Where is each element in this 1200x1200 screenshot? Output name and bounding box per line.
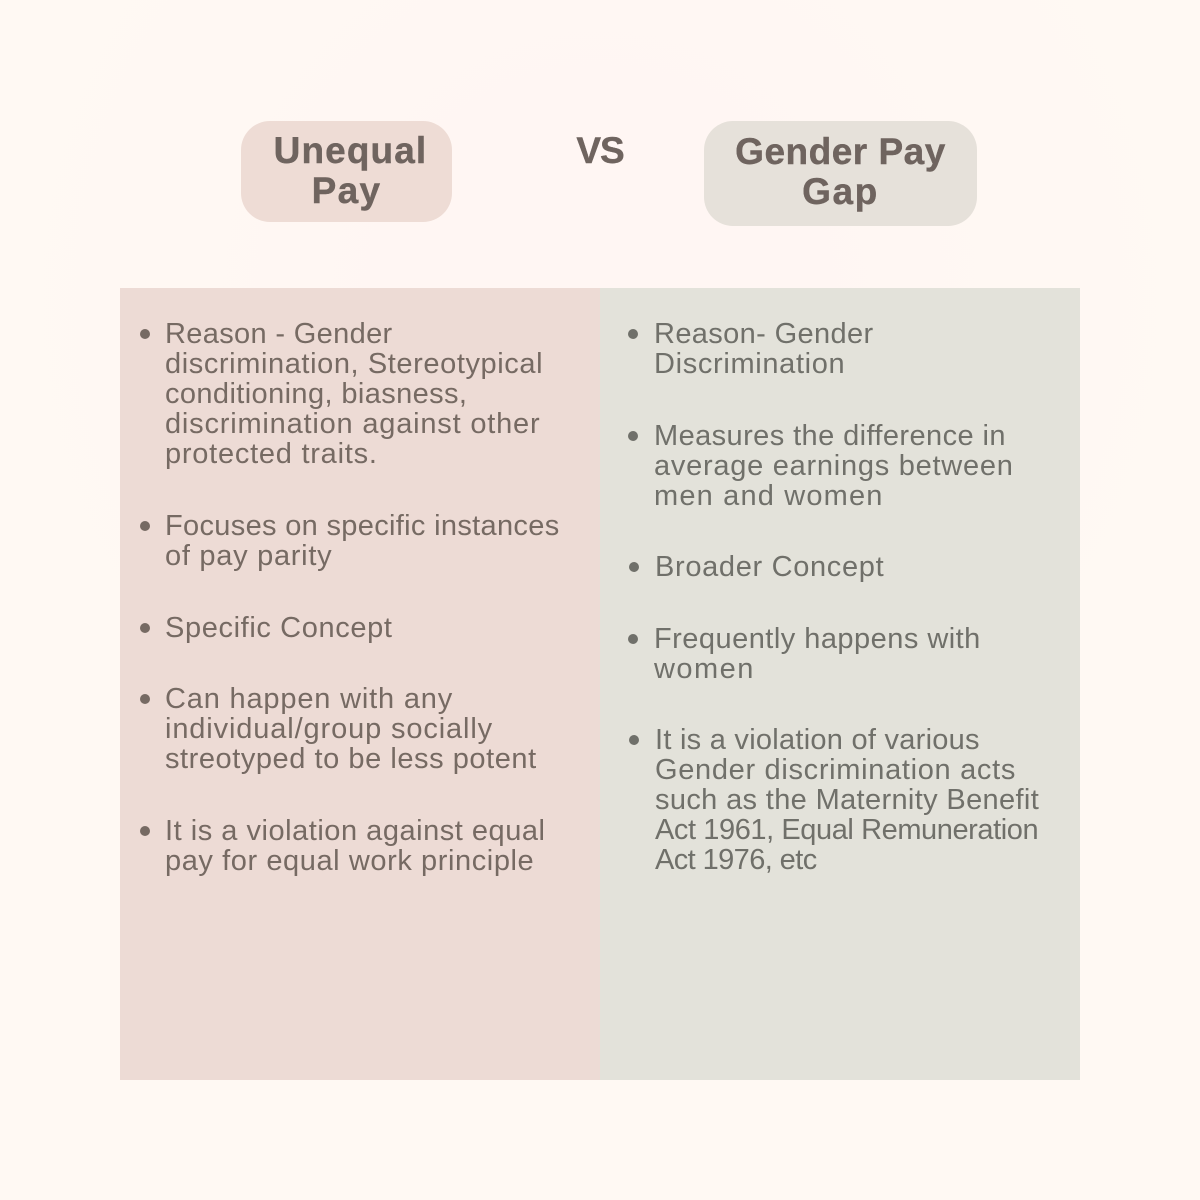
bullet list: Gender Pay Gap: Act 1976, etc <box>655 844 817 876</box>
header pill: Unequal Pay <box>241 121 452 222</box>
bullet list: Unequal Pay: Can happen with any <box>165 683 453 715</box>
bullet list: Gender Pay Gap: Gender discrimination acts <box>655 754 1016 786</box>
bullet list: Gender Pay Gap: Act 1961, Equal Remuneration <box>655 814 1038 846</box>
bullet list: Gender Pay Gap: women <box>654 653 755 685</box>
header pill: Gender Pay Gap: Gender Pay <box>735 131 946 172</box>
bullet list: Unequal Pay: discrimination, Stereotypical <box>165 348 543 380</box>
bullet list: Gender Pay Gap: Discrimination <box>654 348 845 380</box>
bullet list: Gender Pay Gap: Frequently happens with <box>654 623 981 655</box>
header pill: Unequal Pay: Unequal <box>274 130 427 171</box>
panel: Unequal Pay <box>120 288 600 1080</box>
header pill: Gender Pay Gap: Gap <box>802 171 879 212</box>
bullet list: Gender Pay Gap: average earnings between <box>654 450 1014 482</box>
bullet list: Gender Pay Gap: men and women <box>654 480 884 512</box>
bullet list: Unequal Pay: discrimination against other <box>165 408 540 440</box>
bullet list: Unequal Pay: Specific Concept <box>165 612 393 644</box>
bullet list: Gender Pay Gap: It is a violation of various <box>655 724 980 756</box>
panel: Gender Pay Gap <box>600 288 1080 1080</box>
bullet list: Unequal Pay: Focuses on specific instances <box>165 510 560 542</box>
header pill: Gender Pay Gap <box>704 121 977 226</box>
bullet list: Gender Pay Gap: Measures the difference in <box>654 420 1006 452</box>
bullet list: Unequal Pay: Reason - Gender <box>165 318 393 350</box>
bullet list: Gender Pay Gap: such as the Maternity Benefit <box>655 784 1039 816</box>
bullet list: Unequal Pay: conditioning, biasness, <box>165 378 467 410</box>
bullet list: Gender Pay Gap: Reason- Gender <box>654 318 874 350</box>
VS label: VS <box>576 130 624 171</box>
bullet list: Gender Pay Gap <box>628 318 1039 876</box>
header pill: Unequal Pay: Pay <box>312 170 381 211</box>
bullet list: Gender Pay Gap: Broader Concept <box>655 551 884 583</box>
bullet list: Unequal Pay: individual/group socially <box>165 713 493 745</box>
bullet list: Unequal Pay: of pay parity <box>165 540 332 572</box>
bullet list: Unequal Pay: pay for equal work principle <box>165 845 534 877</box>
bullet list: Unequal Pay: streotyped to be less potent <box>165 743 537 775</box>
bullet list: Unequal Pay <box>140 318 560 877</box>
bullet list: Unequal Pay: It is a violation against equal <box>165 815 545 847</box>
bullet list: Unequal Pay: protected traits. <box>165 438 378 470</box>
